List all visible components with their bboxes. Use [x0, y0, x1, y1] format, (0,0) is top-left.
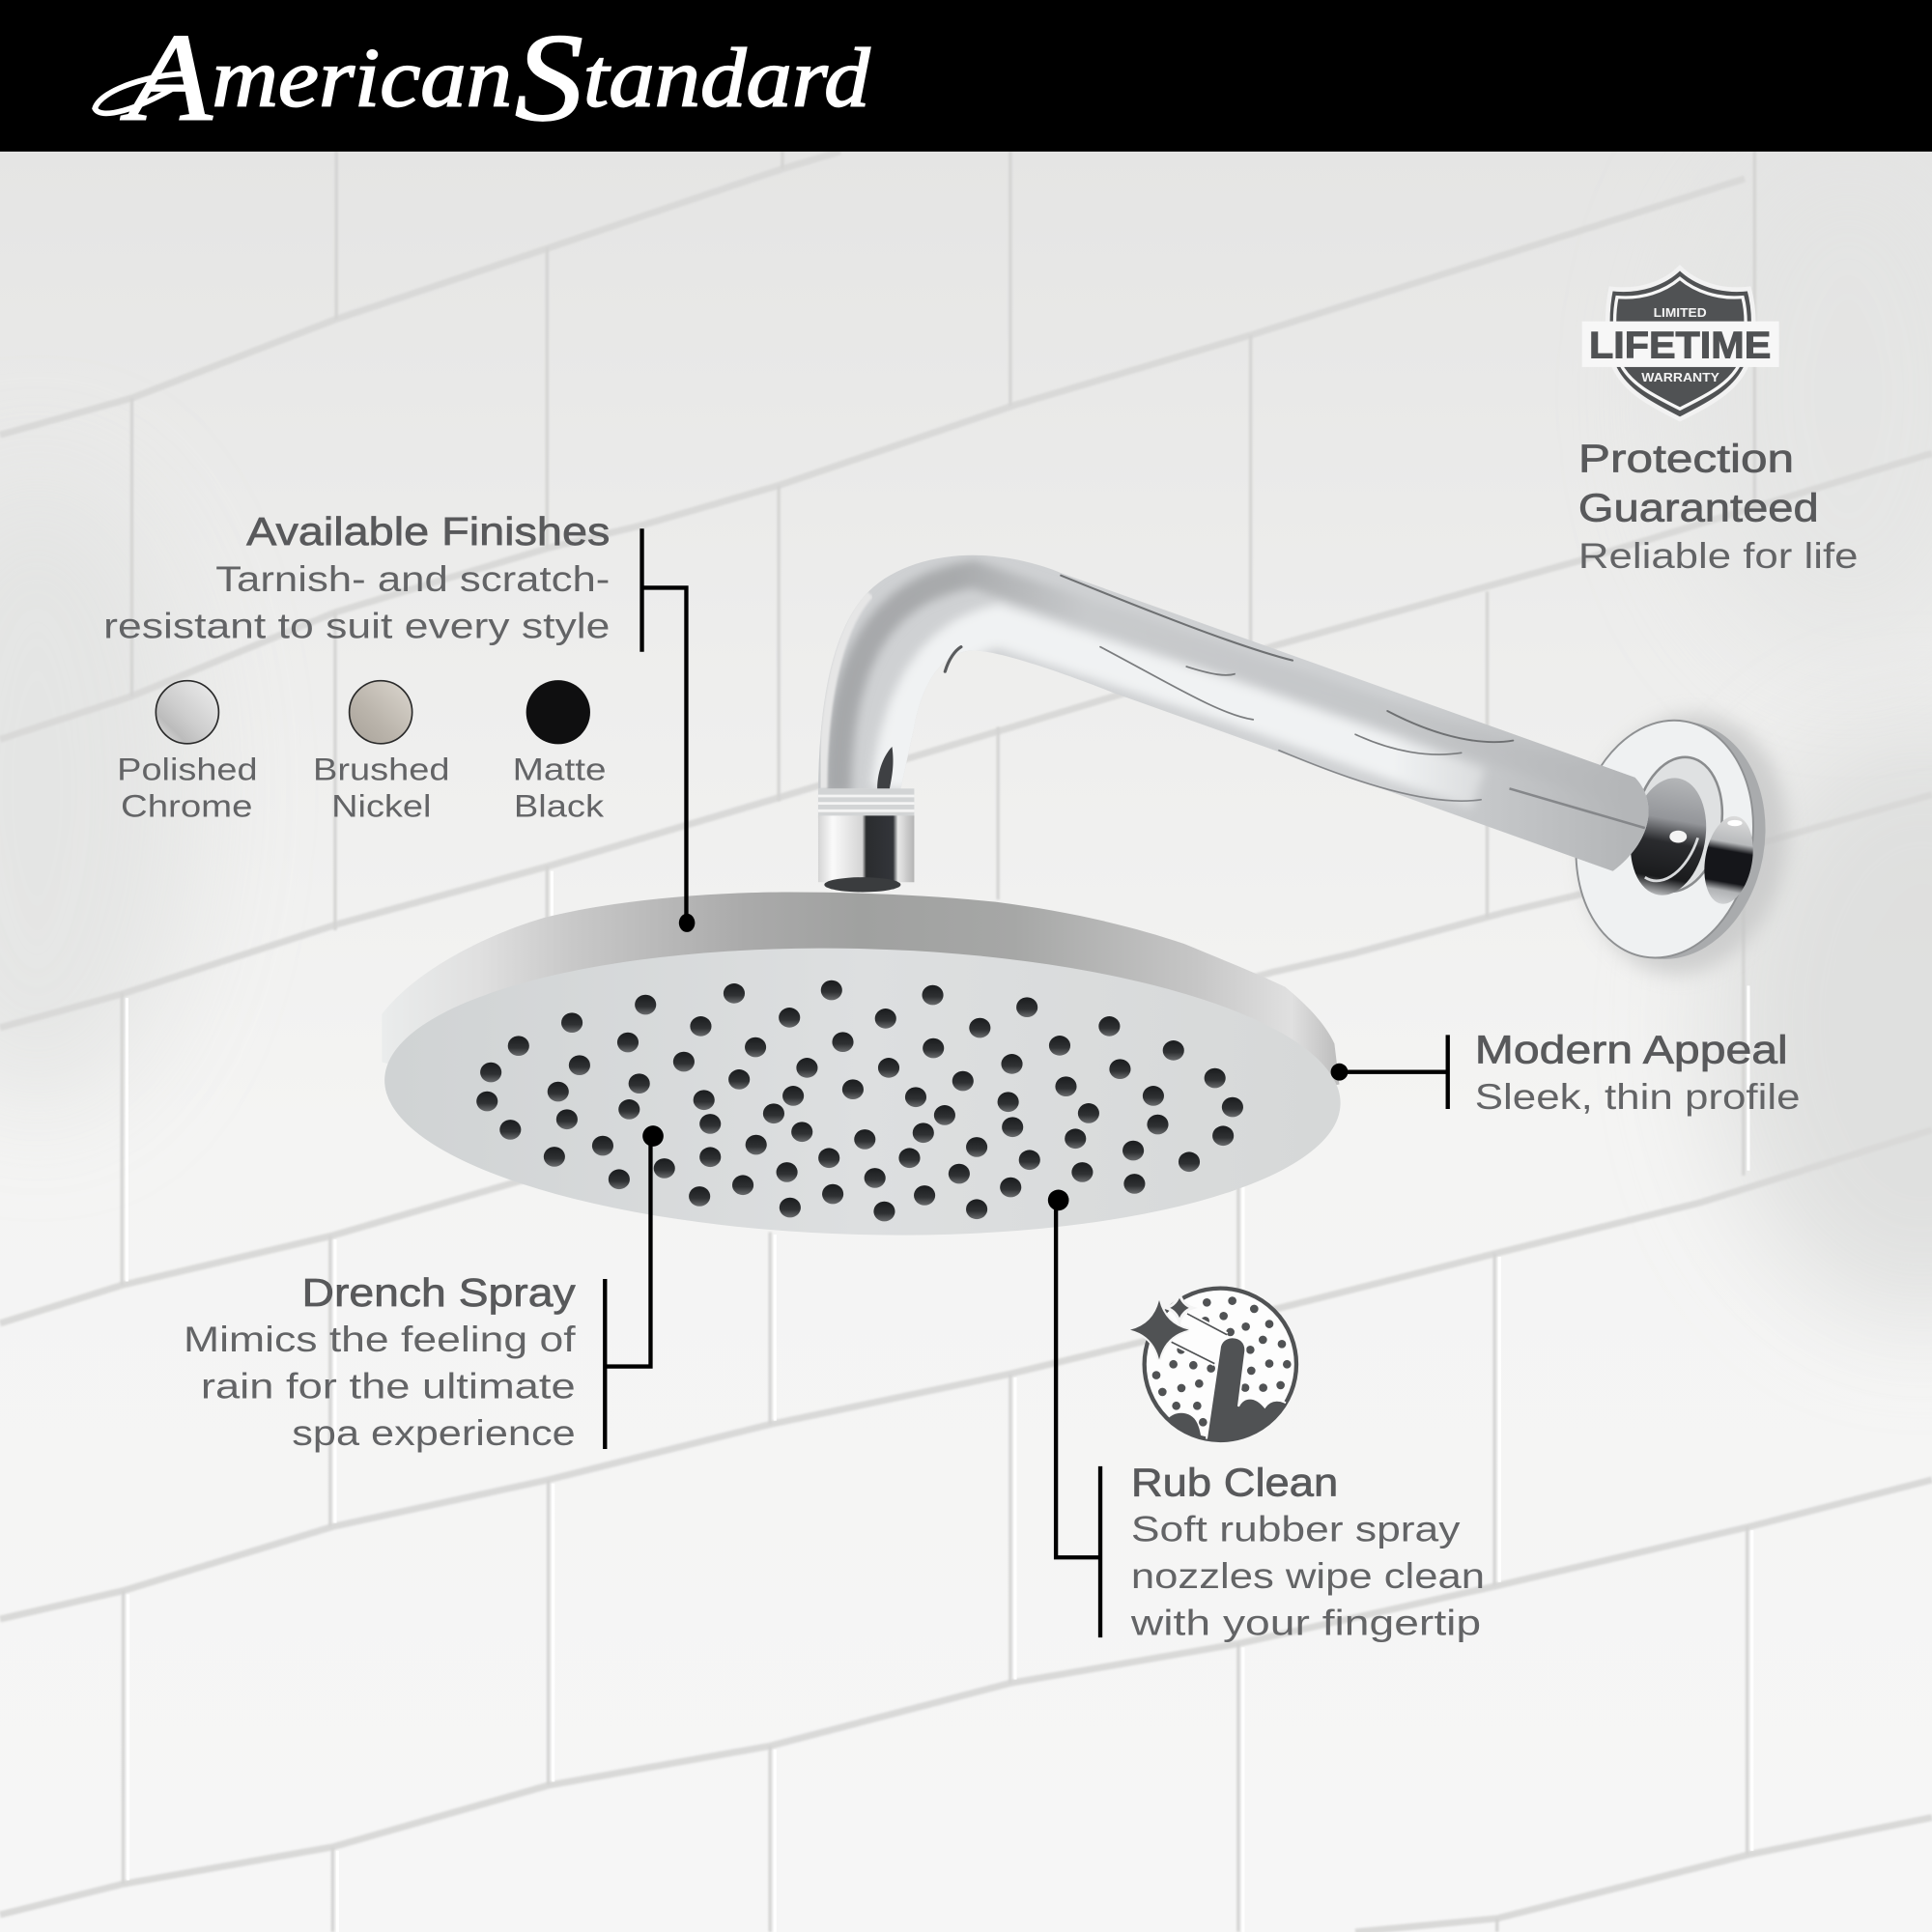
icon: rub clean nozzle	[1130, 1289, 1296, 1446]
text block: Rub Clean: with your fingertip	[1130, 1604, 1481, 1643]
text block: Available Finishes: Tarnish- and scratch-	[215, 559, 610, 599]
text block: Protection Guaranteed: Protection	[1578, 437, 1794, 481]
icon: limited lifetime warranty shield: WARRANTY	[1641, 371, 1720, 384]
text block: Drench Spray: rain for the ultimate	[201, 1367, 576, 1406]
finish swatch: Matte Black: Black	[514, 789, 605, 824]
finish swatch: Brushed Nickel: Nickel	[331, 789, 431, 824]
text block: Protection Guaranteed: Reliable for life	[1578, 536, 1858, 576]
text block: Rub Clean: nozzles wipe clean	[1131, 1556, 1485, 1596]
icon: limited lifetime warranty shield: LIMITED	[1654, 306, 1707, 320]
wall nut	[1622, 772, 1715, 901]
product: shower arm	[801, 542, 1784, 974]
text block: Modern Appeal	[1475, 1028, 1801, 1117]
callout leader: Rub Clean	[1048, 1190, 1100, 1637]
nozzles	[476, 980, 1243, 1221]
collar	[818, 815, 914, 882]
text block: Modern Appeal: Modern Appeal	[1475, 1028, 1788, 1072]
logo: American Standard: S	[515, 9, 583, 148]
logo: American Standard: A	[120, 9, 213, 148]
finish swatch: Brushed Nickel	[313, 681, 450, 824]
face plate	[381, 936, 1344, 1247]
icon: limited lifetime warranty shield: LIFETIME	[1589, 326, 1771, 367]
text block: Drench Spray	[184, 1270, 577, 1453]
finish swatch: Brushed Nickel: Brushed	[313, 752, 450, 786]
arm tube	[818, 554, 1648, 871]
finish swatch: Matte Black: Matte	[513, 752, 607, 786]
text block: Rub Clean: Soft rubber spray	[1131, 1510, 1461, 1549]
text block: Available Finishes: Available Finishes	[246, 509, 610, 554]
logo: American Standard: merican	[212, 32, 512, 125]
text block: Drench Spray: spa experience	[292, 1413, 576, 1453]
header bar	[0, 0, 1932, 152]
product: shower head	[381, 892, 1344, 1247]
icon: limited lifetime warranty shield	[1582, 268, 1779, 419]
finish swatch: Polished Chrome	[117, 681, 258, 824]
callout leader: Modern Appeal	[1331, 1035, 1448, 1109]
arm reflections	[877, 576, 1513, 801]
collar base	[824, 877, 900, 892]
text block: Rub Clean: Rub Clean	[1131, 1460, 1338, 1504]
callout leader: Drench Spray	[605, 1125, 664, 1449]
text block: Available Finishes: resistant to suit every style	[103, 607, 610, 646]
thread	[818, 788, 914, 818]
wall flange	[1558, 706, 1784, 974]
text block: Rub Clean	[1130, 1460, 1485, 1643]
rim	[382, 892, 1339, 1182]
text block: Drench Spray: Drench Spray	[301, 1270, 576, 1315]
text block: Protection Guaranteed: Guaranteed	[1578, 486, 1819, 530]
text block: Drench Spray: Mimics the feeling of	[184, 1320, 577, 1359]
callout leader: Available Finishes	[642, 528, 695, 932]
text block: Available Finishes	[103, 509, 610, 646]
text block: Protection Guaranteed	[1578, 437, 1858, 576]
logo: American Standard: tandard	[583, 32, 870, 125]
set screw	[1698, 812, 1759, 908]
finish swatch: Polished Chrome: Polished	[117, 752, 258, 786]
text block: Modern Appeal: Sleek, thin profile	[1475, 1077, 1801, 1117]
finish swatch: Matte Black	[513, 680, 607, 824]
finish swatch: Polished Chrome: Chrome	[121, 789, 252, 824]
logo: American Standard	[95, 9, 870, 148]
